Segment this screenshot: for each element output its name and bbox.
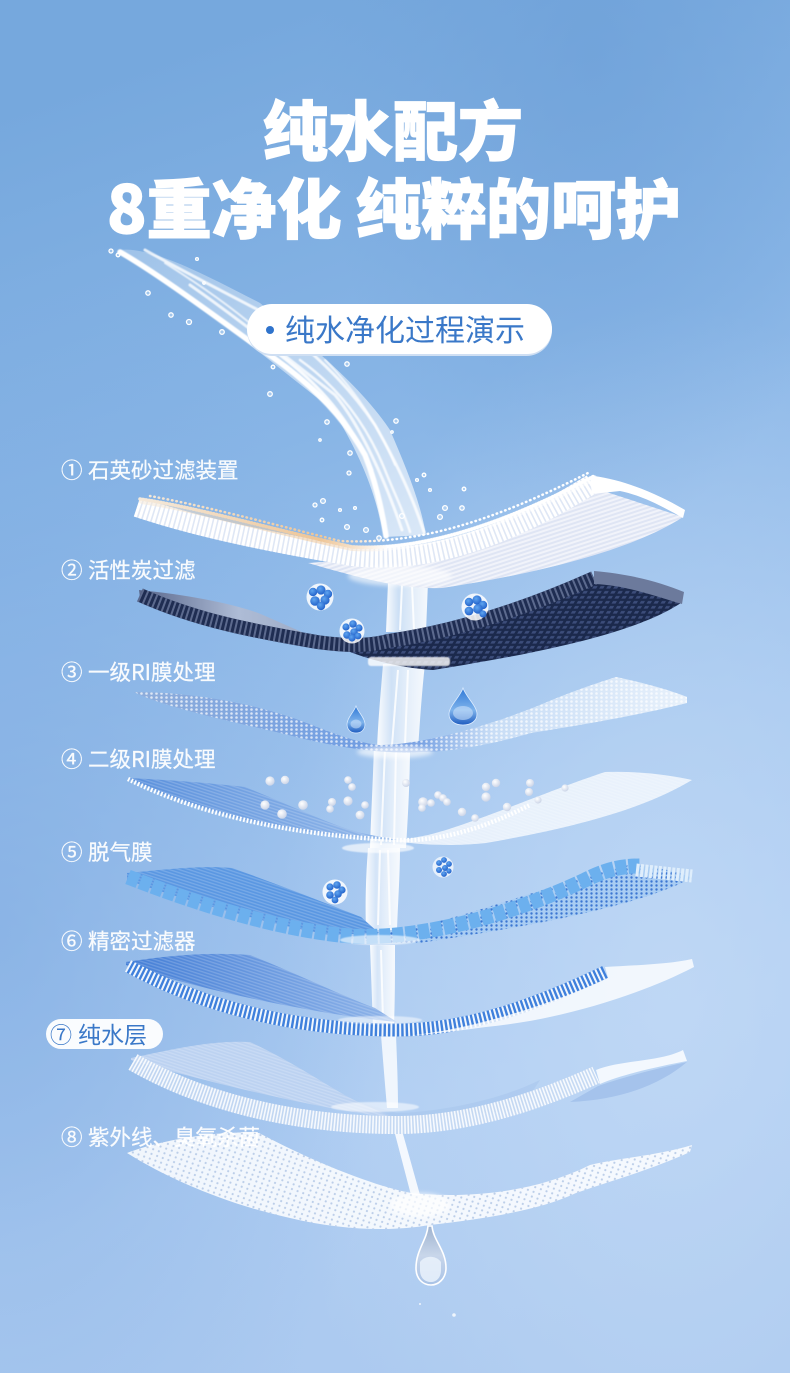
label 7 pill: ⑦ bbox=[50, 1018, 72, 1050]
label 6: 精密过滤器 bbox=[88, 925, 196, 956]
molecule cluster 2 bbox=[340, 618, 364, 644]
molecule cluster 1 bbox=[306, 584, 334, 610]
filter layer 5: degassing membrane bbox=[127, 865, 692, 945]
icon: small blue drop bbox=[347, 706, 365, 733]
bubbles bbox=[109, 249, 466, 540]
label 4: 二级RI膜处理 bbox=[88, 743, 215, 774]
stray droplets bbox=[419, 1303, 456, 1317]
filter layer 1: quartz sand bbox=[137, 472, 685, 588]
splash bbox=[348, 566, 452, 586]
label 3: 一级RI膜处理 bbox=[88, 656, 215, 687]
gas balls bbox=[260, 776, 569, 822]
title: 8重净化 bbox=[107, 158, 342, 252]
label 4: ④ bbox=[61, 743, 83, 774]
label 1: ① bbox=[61, 454, 83, 485]
label 3: ③ bbox=[61, 656, 83, 687]
splash bbox=[340, 935, 420, 945]
white end cap bbox=[596, 1050, 687, 1084]
label 2: ② bbox=[61, 554, 83, 585]
end cap bbox=[594, 571, 684, 604]
water stream pouring bbox=[118, 250, 426, 537]
filter layer 4: second RI membrane bbox=[128, 772, 692, 853]
molecule cluster 4 bbox=[322, 880, 348, 904]
molecule cluster 5 bbox=[432, 856, 454, 878]
splash bbox=[342, 843, 414, 853]
label 1: 石英砂过滤装置 bbox=[88, 454, 239, 485]
label 5: 脱气膜 bbox=[88, 836, 153, 867]
label 5: ⑤ bbox=[61, 836, 83, 867]
sand band bbox=[140, 472, 594, 548]
splash bbox=[357, 746, 433, 758]
icon: final water drop bbox=[416, 1226, 446, 1285]
title: 纯粹的呵护 bbox=[356, 158, 681, 252]
title bbox=[107, 80, 681, 252]
molecule cluster 3 bbox=[462, 594, 488, 620]
pill: process demo heading bbox=[247, 304, 552, 356]
label 8: ⑧ bbox=[61, 1121, 83, 1152]
filter layer 6: precision filter bbox=[126, 954, 694, 1036]
water columns bbox=[366, 582, 428, 1195]
label 2: 活性炭过滤 bbox=[88, 554, 196, 585]
label 7 pill bbox=[46, 1016, 163, 1050]
splash bbox=[390, 1193, 450, 1217]
title: 纯水配方 bbox=[263, 80, 523, 174]
icon: large blue drop bbox=[449, 688, 477, 725]
label 8: 紫外线、臭氧杀菌 bbox=[88, 1121, 260, 1152]
pill: process demo heading: 纯水净化过程演示 bbox=[285, 306, 525, 350]
white right end bbox=[406, 959, 694, 1036]
splash bbox=[331, 1102, 419, 1112]
white end cap bbox=[590, 476, 685, 518]
splash bbox=[338, 1016, 422, 1024]
label 6: ⑥ bbox=[61, 925, 83, 956]
right underside bbox=[570, 1062, 687, 1102]
filter layer 8: UV ozone mesh bbox=[127, 1132, 692, 1229]
splash bbox=[368, 657, 450, 666]
filter layer 7: pure water layer bbox=[131, 1042, 687, 1125]
label 7 pill: 纯水层 bbox=[78, 1016, 147, 1050]
filter layer 3: first RI membrane bbox=[134, 677, 687, 758]
filter layer 2: activated carbon bbox=[139, 571, 684, 670]
